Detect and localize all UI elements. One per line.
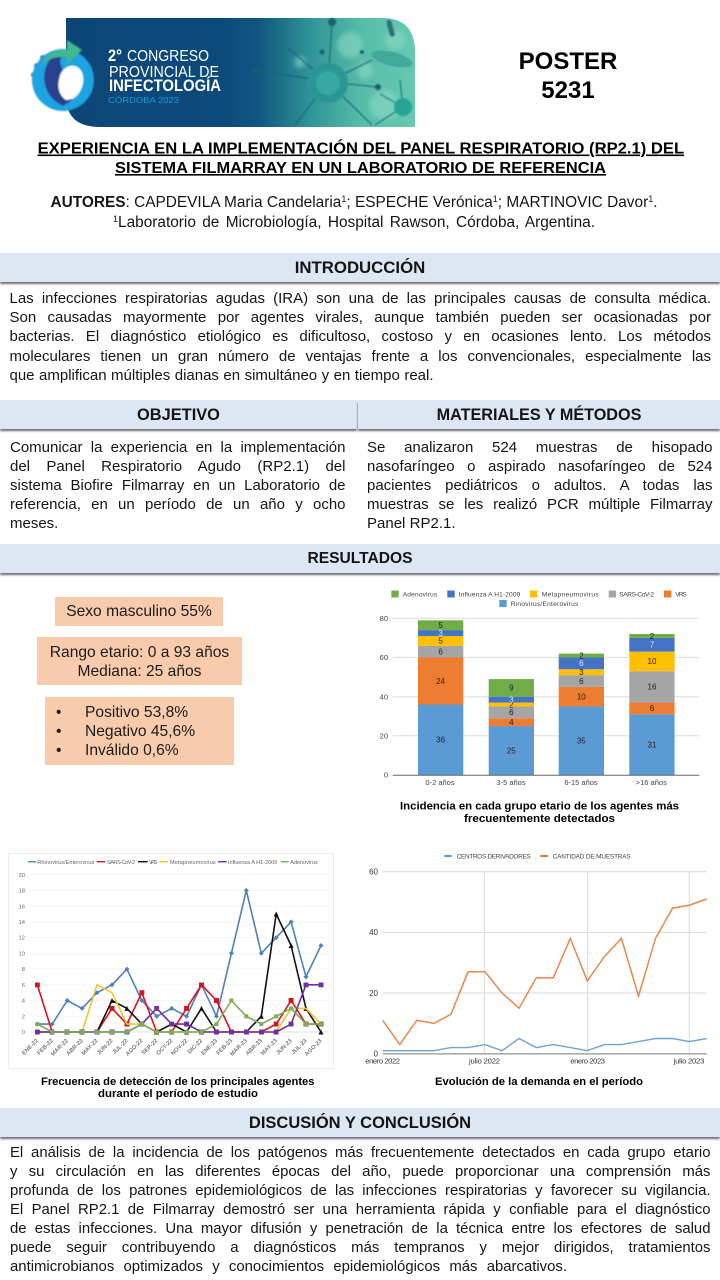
text block: discusión y conclusión: y su circulación en las diferentes épocas del año, puede proporcionar una comprensión más	[10, 1164, 710, 1180]
line chart: frecuencia de detección: MAR-22	[50, 1038, 70, 1058]
line chart: evolución de la demanda: julio 2022	[468, 1056, 500, 1065]
stacked bar: 3-5 años: 4	[509, 718, 514, 727]
panel: introducción	[0, 253, 720, 384]
stat box: rango etario y mediana: Rango etario: 0 a 93 años	[50, 644, 229, 661]
line chart: evolución de la demanda: julio 2023	[673, 1056, 704, 1065]
authors and affiliation	[50, 194, 658, 230]
bar chart: incidencia por grupo etario: >16 años	[636, 778, 667, 787]
caption: evolución de la demanda: Evolución de la demanda en el período	[435, 1076, 643, 1088]
bar chart: incidencia por grupo etario: 40	[380, 692, 388, 701]
text block: introducción: Las infecciones respiratorias agudas (IRA) son una de las principales causas de consulta médica.	[10, 290, 711, 307]
stacked bar: 6-15 años: 2	[579, 651, 584, 660]
line chart: frecuencia de detección: 0	[22, 1030, 25, 1036]
chart legend: CANTIDAD DE MUESTRAS	[553, 853, 631, 860]
line chart: frecuencia de detección: JUL-23	[291, 1038, 309, 1056]
stat box: resultados de las muestras: •	[56, 742, 61, 759]
text block: discusión y conclusión	[10, 1145, 710, 1275]
heading: introducción	[0, 253, 720, 282]
caption: frecuencia de detección: durante el período de estudio	[98, 1088, 258, 1100]
line chart: evolución de la demanda: enero 2022	[365, 1056, 400, 1065]
stacked bar: 6-15 años: 6	[579, 659, 584, 668]
chart legend: Metapneumovirus	[170, 860, 216, 866]
title: SISTEMA FILMARRAY EN UN LABORATORIO DE REFERENCIA	[115, 160, 606, 177]
text block: discusión y conclusión: antimicrobianos optimizados y conocimientos epidemiológicos más abarcativos.	[10, 1259, 567, 1275]
stacked bar: 3-5 años: 9	[509, 684, 514, 693]
stacked bar: mayores de 16 años: 10	[648, 657, 657, 666]
title	[38, 138, 684, 177]
caption: frecuencia de detección	[41, 1076, 314, 1100]
chart legend: VRS	[675, 592, 687, 599]
stacked bar: mayores de 16 años: 2	[650, 632, 655, 641]
bar chart: incidencia por grupo etario: 60	[380, 653, 388, 662]
line chart: frecuencia de detección: JUL-22	[112, 1038, 130, 1056]
text block: discusión y conclusión: El Panel RP2.1 de Filmarray demostró ser una herramienta rápida y confiable para el diagnóstico	[10, 1202, 710, 1218]
line chart: evolución de la demanda: 0	[374, 1050, 379, 1058]
caption: gráfico de barras: frecuentemente detectados	[464, 813, 615, 825]
icon: congress emblem	[31, 40, 94, 111]
chart legend: Influenza A H1-2009	[459, 592, 521, 599]
chart legend: Influenza A H1-2009	[228, 860, 277, 866]
chart legend: SARS-CoV-2	[107, 860, 135, 866]
series: VRS	[37, 914, 321, 1032]
stacked bar: 0-2 años: 5	[438, 621, 443, 630]
text block: introducción	[10, 290, 711, 384]
heading: objetivo	[0, 400, 357, 429]
chart legend: VRS	[149, 860, 158, 866]
logo banner: 2° Congreso Provincial de Infectología: PROVINCIAL DE	[109, 64, 219, 81]
stacked bar: mayores de 16 años: 16	[648, 683, 657, 692]
series: SARS-CoV-2	[37, 985, 321, 1032]
line chart: frecuencia de detección: 6	[22, 983, 25, 989]
heading: discusión y conclusión	[0, 1108, 720, 1137]
line chart: frecuencia de detección: JUN-23	[275, 1038, 294, 1057]
stat box: resultados de las muestras: Negativo 45,6%	[85, 723, 195, 740]
stat box: resultados de las muestras	[45, 697, 234, 765]
heading: materiales y métodos	[358, 400, 720, 429]
chart legend: SARS-CoV-2	[619, 592, 654, 599]
series: influenza A H1-2009	[37, 985, 321, 1032]
stacked bar: 0-2 años: 6	[438, 647, 443, 656]
title: EXPERIENCIA EN LA IMPLEMENTACIÓN DEL PANEL RESPIRATORIO (RP2.1) DEL	[38, 138, 684, 158]
stacked bar: 3-5 años: 25	[507, 746, 516, 755]
stat box: rango etario y mediana	[37, 637, 242, 685]
line chart: evolución de la demanda: enero 2023	[570, 1056, 605, 1065]
text block: introducción: bacterias. El diagnóstico etiológico es dificultoso, costoso y en ocasiones lento. Los métodos	[10, 328, 711, 345]
caption: gráfico de barras: Incidencia en cada grupo etario de los agentes más	[400, 801, 679, 813]
bar chart: incidencia por grupo etario: 0	[384, 771, 388, 780]
line chart: evolución de la demanda: 20	[369, 989, 379, 998]
logo banner: 2° Congreso Provincial de Infectología: 2°	[108, 46, 122, 65]
stacked bar: mayores de 16 años: 7	[650, 641, 655, 650]
bar chart: incidencia por grupo etario: 3-5 años	[496, 778, 526, 787]
text block: introducción: Son causadas mayormente por agentes virales, aunque también pueden ser ocasionadas por	[10, 309, 711, 326]
text block: materiales y métodos: Se analizaron 524 muestras de hisopado	[367, 439, 712, 456]
authors and affiliation: AUTORES: CAPDEVILA Maria Candelaria1; ESPECHE Verónica1; MARTINOVIC Davor1.	[50, 194, 658, 211]
series: centros derivadores	[383, 1038, 707, 1051]
stat box: sexo masculino: Sexo masculino 55%	[66, 603, 212, 620]
authors and affiliation: 1Laboratorio de Microbiología, Hospital Rawson, Córdoba, Argentina.	[113, 214, 595, 230]
text block: materiales y métodos: pacientes pediátricos o adultos. A todas las	[367, 477, 712, 494]
chart legend: Adenovirus	[290, 860, 318, 866]
chart legend: Adenovirus	[403, 592, 438, 599]
series: rhinovirus/enterovirus	[37, 890, 321, 1024]
chart legend	[391, 590, 687, 608]
poster number	[519, 48, 617, 104]
stat box: resultados de las muestras: Positivo 53,8%	[85, 704, 188, 721]
stat box: resultados de las muestras: •	[56, 704, 61, 721]
chart legend: Rinovirus/Enterovirus	[511, 601, 579, 608]
line chart: frecuencia de detección: AGO-22	[125, 1038, 144, 1058]
logo banner: 2° Congreso Provincial de Infectología: CONGRESO	[127, 48, 209, 65]
stacked bar: 0-2 años: 5	[438, 637, 443, 646]
stat box: resultados de las muestras: Inválido 0,6%	[85, 742, 179, 759]
series: cantidad de muestras	[383, 899, 707, 1045]
line chart: frecuencia de detección: 8	[22, 967, 25, 973]
line chart: frecuencia de detección: 20	[19, 873, 25, 879]
text block: introducción: que amplifican múltiples dianas en simultáneo y en tiempo real.	[10, 367, 434, 384]
stacked bar: 3-5 años: 2	[509, 700, 514, 709]
line chart: frecuencia de detección: 10	[19, 951, 25, 957]
heading: resultados: RESULTADOS	[307, 550, 413, 567]
text block: objetivo: meses.	[10, 515, 58, 532]
stacked bar: 6-15 años	[559, 651, 604, 775]
stat box: resultados de las muestras: •	[56, 723, 61, 740]
bar chart: incidencia por grupo etario: 6-15 años	[564, 778, 598, 787]
line chart: frecuencia de detección: ENE-23	[201, 1038, 220, 1057]
line chart: frecuencia de detección: ENE-22	[21, 1038, 40, 1057]
series: adenovirus	[37, 1000, 321, 1032]
line chart: frecuencia de detección: 14	[19, 920, 26, 926]
logo banner: 2° Congreso Provincial de Infectología	[30, 17, 415, 127]
line chart: frecuencia de detección: ABR-23	[245, 1038, 264, 1057]
text block: materiales y métodos: nasofaríngeo o aspirado nasofaríngeo de 524	[367, 458, 712, 475]
chart legend: CENTROS DERIVADORES	[457, 853, 531, 860]
chart legend	[28, 860, 318, 866]
stacked bar: 3-5 años: 3	[509, 695, 514, 704]
line chart: frecuencia de detección: MAY-23	[260, 1038, 279, 1057]
stacked bar: 0-2 años: 3	[438, 629, 443, 638]
line chart: frecuencia de detección: DIC-22	[187, 1038, 204, 1055]
line chart: frecuencia de detección: MAR-23	[229, 1038, 249, 1058]
caption: frecuencia de detección: Frecuencia de detección de los principales agentes	[41, 1076, 314, 1088]
heading: resultados	[0, 544, 720, 573]
stacked bar: 6-15 años: 6	[579, 677, 584, 686]
text block: discusión y conclusión: El análisis de la incidencia de los patógenos más frecuentemente detectados en cada grupo etario	[10, 1145, 710, 1161]
stacked bar: 0-2 años	[418, 620, 463, 775]
line chart: frecuencia de detección: FEB-22	[36, 1038, 55, 1057]
stacked bar: 6-15 años: 35	[577, 736, 586, 746]
text block: materiales y métodos: muestras se les realizó PCR múltiple Filmarray	[367, 496, 712, 513]
caption: gráfico de barras	[400, 801, 679, 825]
logo banner: 2° Congreso Provincial de Infectología: CÓRDOBA 2023	[108, 95, 179, 105]
heading: introducción: INTRODUCCIÓN	[295, 258, 425, 277]
line chart: frecuencia de detección: JUN-22	[96, 1038, 115, 1057]
line chart: frecuencia de detección: 4	[22, 999, 26, 1005]
chart legend	[444, 853, 631, 860]
panel: materiales y métodos	[356, 400, 720, 532]
text block: objetivo: sistema Biofire Filmarray en un Laboratorio de	[10, 477, 346, 494]
text block: discusión y conclusión: profunda de los patrones epidemiológicos de las infecciones respiratorias y favorecer su vigilancia.	[10, 1183, 710, 1199]
text block: materiales y métodos: Panel RP2.1.	[367, 515, 456, 532]
line chart: frecuencia de detección: AGO-23	[304, 1038, 324, 1058]
heading: materiales y métodos: MATERIALES Y MÉTODOS	[437, 406, 641, 424]
text block: objetivo	[10, 439, 346, 532]
stacked bar: 3-5 años	[489, 679, 534, 775]
text block: discusión y conclusión: puede seguir contribuyendo a diagnósticos más tempranos y mejor dirigidos, tratamientos	[10, 1240, 710, 1256]
line chart: frecuencia de detección: 18	[19, 888, 25, 894]
chart legend: Rhinovirus/Enterovirus	[37, 860, 95, 866]
line chart: frecuencia de detección: OCT-22	[156, 1038, 174, 1057]
heading: objetivo: OBJETIVO	[137, 406, 220, 424]
stacked bar: 0-2 años: 24	[436, 677, 446, 686]
stacked bar: 0-2 años: 36	[436, 736, 446, 744]
bar chart: incidencia por grupo etario: 20	[380, 731, 388, 740]
heading: discusión y conclusión: DISCUSIÓN Y CONCLUSIÓN	[249, 1114, 471, 1132]
poster number: POSTER	[519, 48, 617, 75]
line chart: frecuencia de detección: 16	[19, 904, 25, 910]
line chart: frecuencia de detección: 12	[19, 936, 25, 942]
stacked bar: mayores de 16 años	[629, 632, 675, 775]
stacked bar: mayores de 16 años: 31	[648, 740, 657, 749]
bar chart: incidencia por grupo etario: 0-2 años	[425, 778, 455, 787]
text block: objetivo: Comunicar la experiencia en la implementación	[10, 439, 346, 456]
line chart: frecuencia de detección	[8, 853, 334, 1069]
series: metapneumovirus	[37, 985, 321, 1032]
line chart: evolución de la demanda: 60	[369, 868, 379, 876]
logo banner: 2° Congreso Provincial de Infectología: INFECTOLOGÍA	[109, 76, 221, 95]
text block: discusión y conclusión: de estas infecciones. Una mayor difusión y penetración de la técnica entre los efectores de salud	[10, 1221, 710, 1237]
stacked bar: 3-5 años: 6	[509, 708, 514, 717]
line chart: evolución de la demanda	[365, 853, 707, 1065]
stacked bar: 6-15 años: 3	[579, 668, 584, 677]
text block: materiales y métodos	[367, 439, 712, 532]
text block: objetivo: referencia, en un período de un año y ocho	[10, 496, 346, 513]
line chart: frecuencia de detección: SEP-22	[141, 1038, 159, 1057]
text block: objetivo: del Panel Respiratorio Agudo (RP2.1) del	[10, 458, 346, 475]
line chart: frecuencia de detección: FEB-23	[216, 1038, 235, 1057]
stat box: sexo masculino	[55, 597, 223, 626]
line chart: frecuencia de detección: 2	[22, 1014, 25, 1020]
poster number: 5231	[541, 77, 595, 104]
line chart: frecuencia de detección: ABR-22	[66, 1038, 85, 1057]
bar chart: incidencia por grupo etario	[380, 590, 700, 787]
stat box: rango etario y mediana: Mediana: 25 años	[78, 663, 201, 680]
stacked bar: mayores de 16 años: 6	[650, 704, 655, 713]
stacked bar: 6-15 años: 10	[577, 692, 586, 702]
line chart: frecuencia de detección: NOV-22	[170, 1038, 189, 1057]
text block: introducción: moleculares tienen un gran número de ventajas frente a los convencionales, especialmente las	[10, 348, 711, 365]
panel: objetivo	[0, 400, 358, 532]
line chart: evolución de la demanda: 40	[369, 928, 379, 937]
panel: discusión y conclusión	[0, 1108, 720, 1275]
bar chart: incidencia por grupo etario: 80	[380, 614, 388, 623]
chart legend: Metapneumovirus	[542, 592, 599, 599]
line chart: frecuencia de detección: MAY-22	[81, 1038, 100, 1057]
